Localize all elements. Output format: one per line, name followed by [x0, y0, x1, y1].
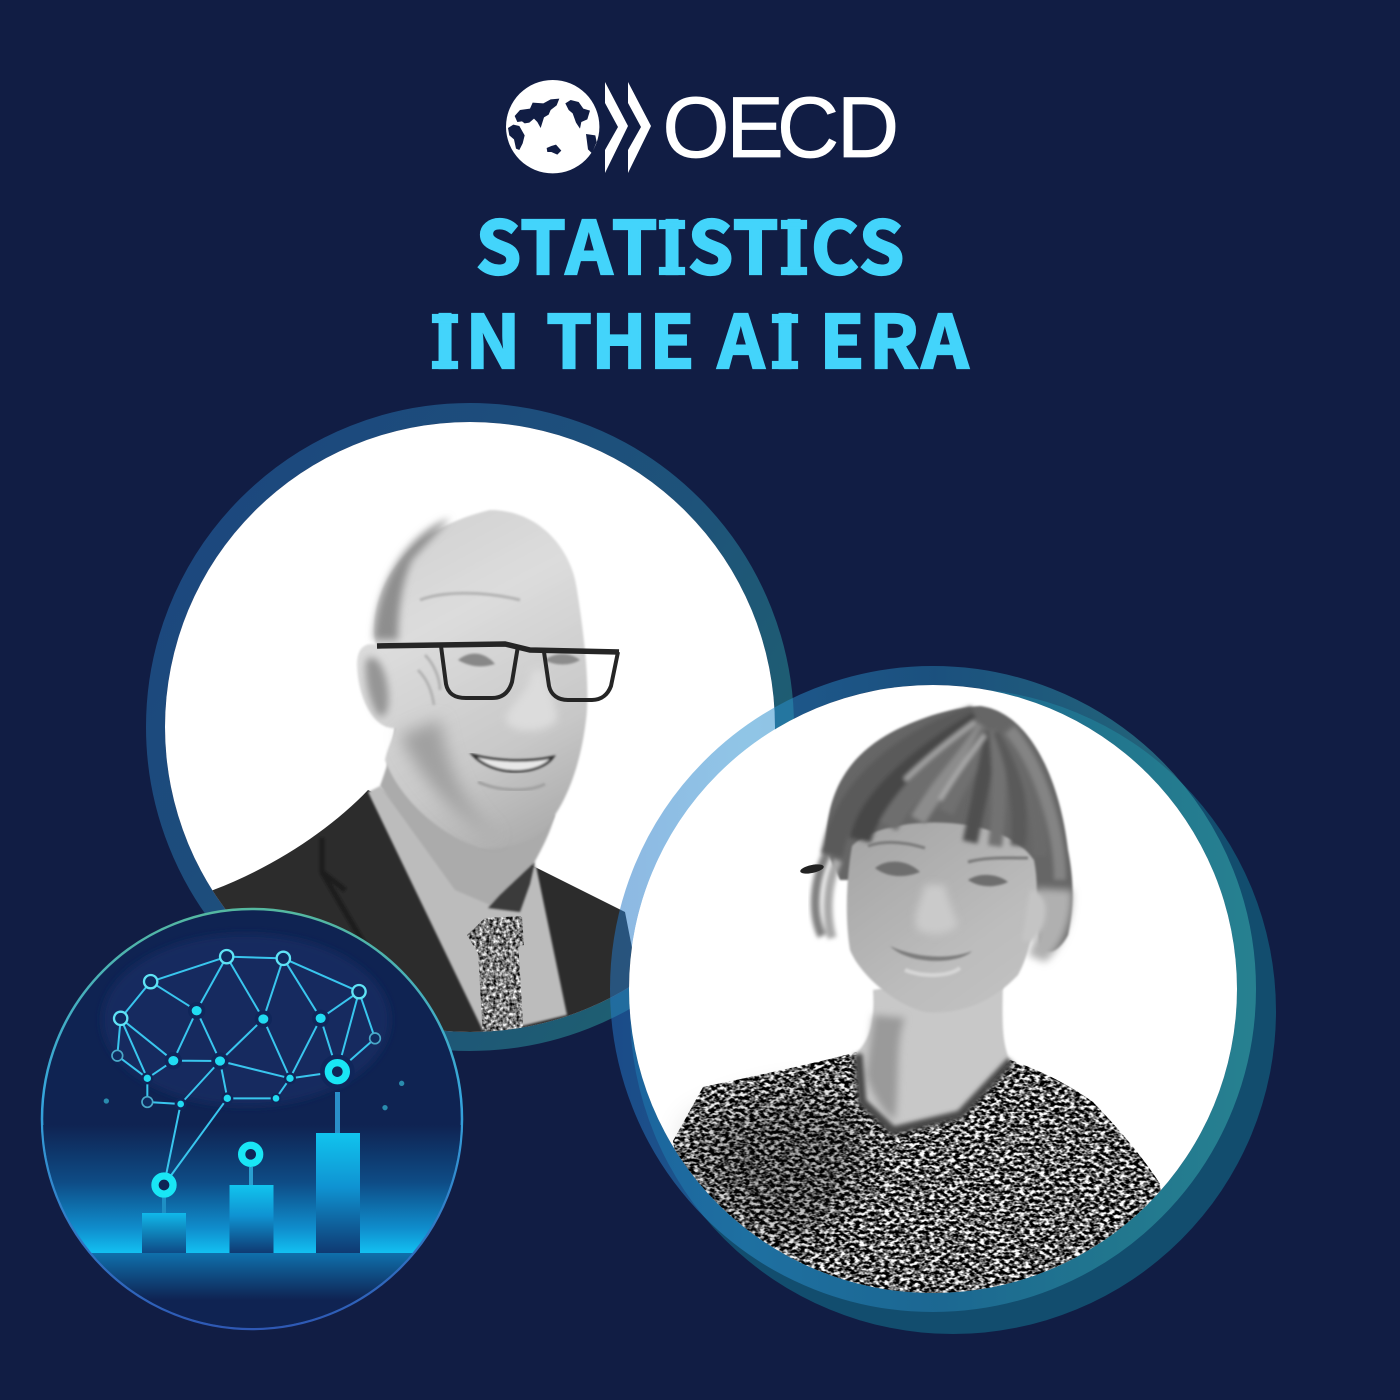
panel: portrait of man: [165, 422, 775, 1040]
suit jacket: [205, 790, 650, 1040]
fringe: [832, 716, 1060, 880]
neck: [856, 988, 1011, 1128]
title: IN THE AI ERA: [433, 284, 970, 390]
sweater shading: [690, 1096, 868, 1236]
crescent behind second portrait: [630, 688, 1276, 1334]
filled nodes: [144, 1006, 326, 1107]
nose: [915, 885, 958, 934]
face: [847, 823, 1037, 1013]
hollow nodes: [114, 950, 366, 1025]
side hair: [374, 518, 450, 640]
sweater: [673, 1052, 1170, 1300]
hair wisp: [815, 848, 838, 938]
logo wordmark: OECD: [663, 80, 899, 176]
smile: [473, 755, 553, 790]
glasses: [377, 644, 619, 700]
icon: globe: [506, 80, 599, 173]
right hair: [1028, 888, 1072, 962]
temple wrinkles: [418, 593, 520, 705]
panel: brain and bar chart emblem: [42, 909, 462, 1333]
sweater collar rib: [858, 1054, 1011, 1131]
ear: [1030, 890, 1047, 942]
chart ring nodes: [155, 1063, 346, 1194]
collar shadow: [488, 862, 535, 912]
OECD logo: [506, 80, 899, 176]
eyes: [868, 842, 1028, 886]
neck shadow: [866, 1015, 905, 1120]
glow background: [42, 934, 462, 1333]
head: [357, 510, 587, 848]
cheek shading: [397, 716, 480, 824]
neck: [380, 720, 555, 905]
feather: [800, 864, 824, 874]
title: STATISTICS: [476, 190, 904, 296]
smile: [890, 946, 972, 975]
ring: second portrait: [620, 676, 1246, 1302]
bars: [142, 1092, 360, 1253]
shirt: [368, 786, 567, 1035]
ring: first portrait: [156, 412, 784, 1042]
tie: [467, 916, 524, 1040]
node halos: [141, 1002, 355, 1110]
title: [433, 190, 970, 390]
panel: portrait of woman: [629, 685, 1237, 1300]
nose: [506, 670, 557, 731]
brain network: [104, 950, 404, 1194]
eyes: [458, 654, 580, 666]
floating dots: [104, 1081, 404, 1110]
hair back: [826, 706, 1073, 952]
icon: chevrons: [605, 82, 651, 173]
lapel line: [320, 838, 366, 940]
ear shadow: [366, 658, 388, 716]
